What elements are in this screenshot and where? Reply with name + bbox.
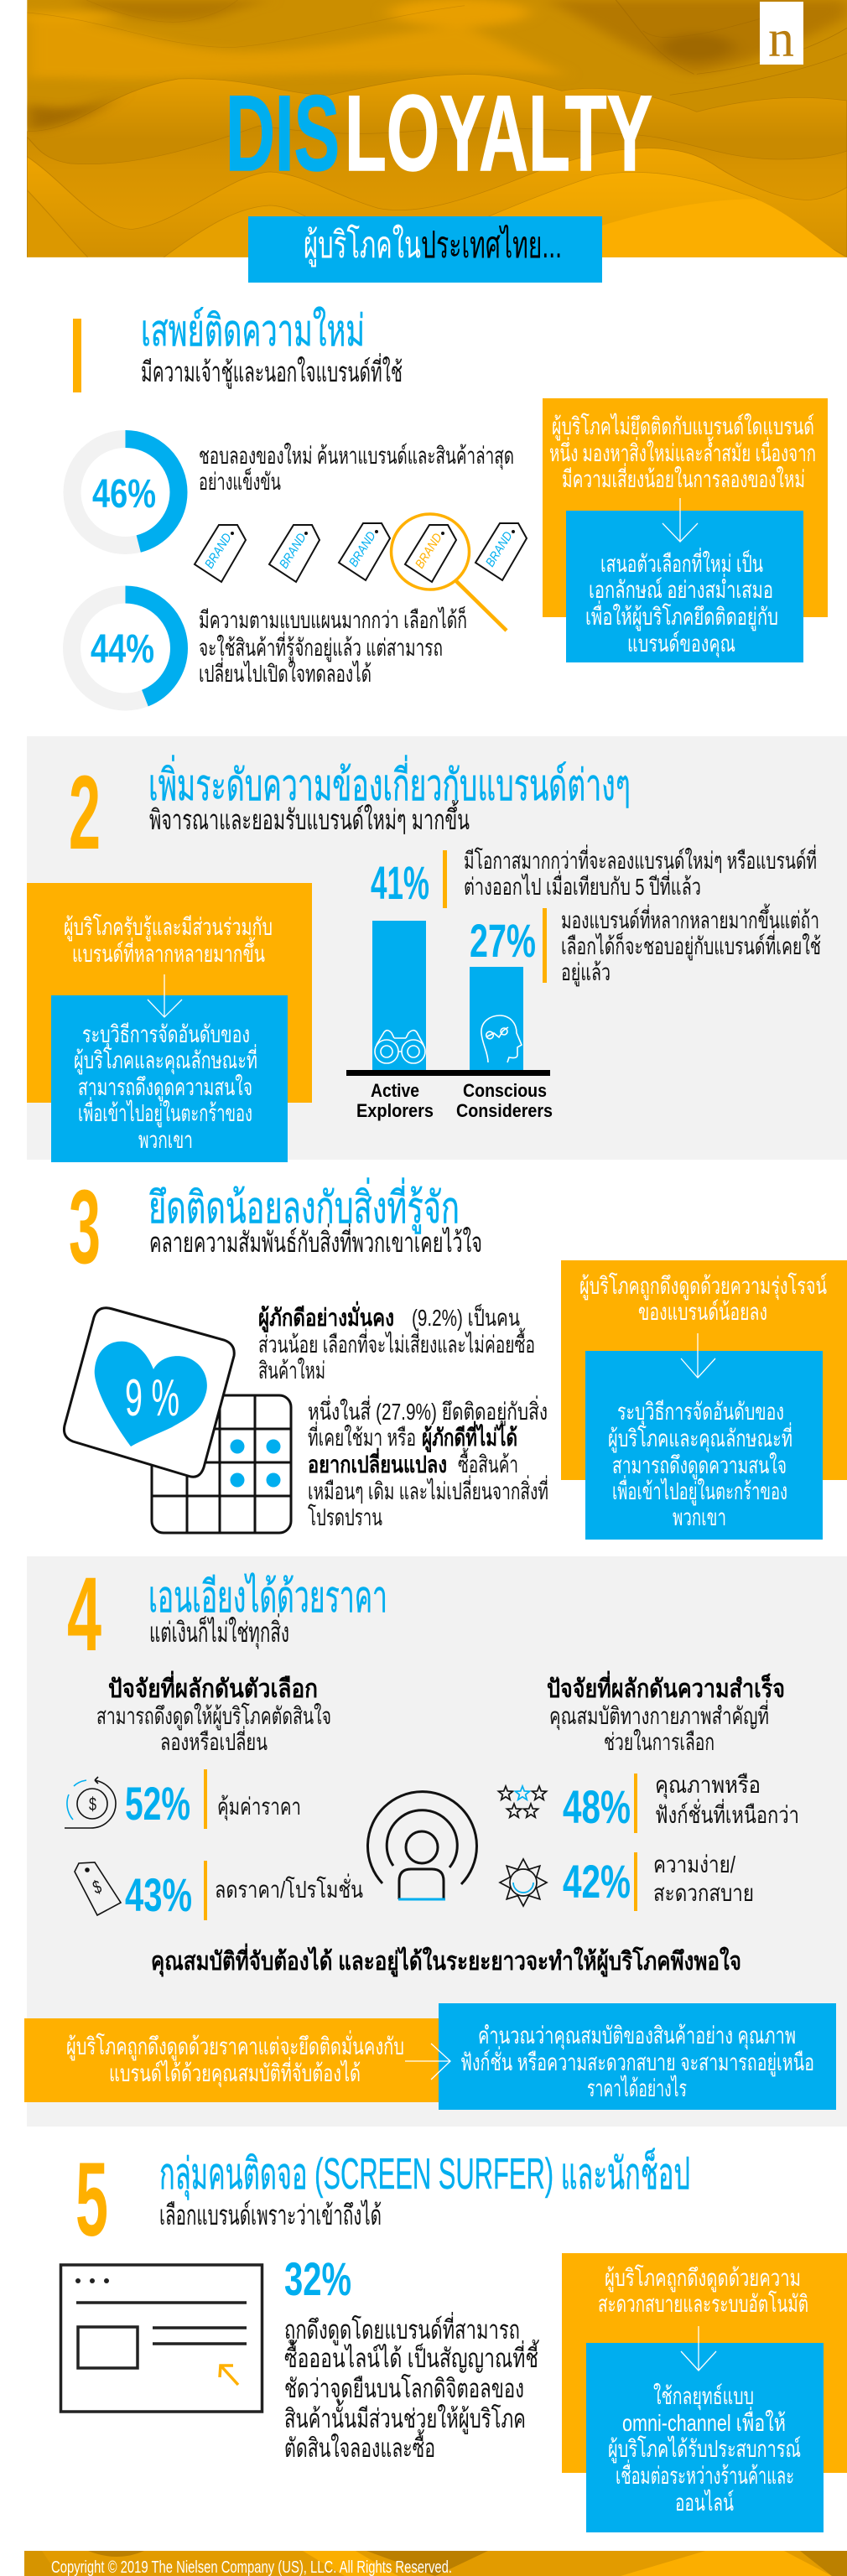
section 2 panel bbox=[27, 736, 847, 1162]
callout 1: เสนอตัวเลือกที่ใหม่ เป็น bbox=[600, 548, 763, 577]
text: passive loyalists: เหมือนๆ เดิม และไม่เปลี่ยนจากสิ่งที่ bbox=[308, 1475, 548, 1504]
main title: DIS bbox=[226, 74, 340, 194]
subheading 2: พิจารณาและยอมรับแบรนด์ใหม่ๆ มากขึ้น bbox=[149, 800, 470, 835]
stat 42 percent bbox=[500, 1852, 754, 1911]
text 44 percent: จะใช้สินค้าที่รู้จักอยู่แล้ว แต่สามารถ bbox=[199, 631, 443, 662]
callout 2: สามารถดึงดูดความสนใจ bbox=[78, 1073, 252, 1102]
arrow bbox=[681, 1333, 715, 1378]
donut 44 percent: 44% bbox=[91, 627, 154, 672]
right column heading: ปัจจัยที่ผลักดันความสำเร็จ bbox=[547, 1670, 785, 1703]
stat 27 percent: อยู่แล้ว bbox=[561, 959, 611, 987]
callout 4: ผู้บริโภคถูกดึงดูดด้วยราคาแต่จะยึดติดมั่นคงกับ bbox=[66, 2030, 404, 2061]
left column heading: ลองหรือเปลี่ยน bbox=[160, 1726, 268, 1755]
icon: head bbox=[481, 1015, 522, 1062]
number 5: 5 bbox=[75, 2142, 108, 2258]
icon: price tag bbox=[75, 1862, 121, 1915]
text 32 percent bbox=[284, 2312, 539, 2463]
brand tags row: BRAND bbox=[202, 531, 235, 571]
text 32 percent: สินค้านั้นมีส่วนช่วยให้ผู้บริโภค bbox=[284, 2400, 526, 2434]
subheading 1: มีความเจ้าชู้และนอกใจแบรนด์ที่ใช้ bbox=[141, 353, 403, 389]
callout 4 bbox=[24, 2003, 836, 2110]
stat 43 percent: 43% bbox=[125, 1868, 192, 1921]
callout 2: แบรนด์ที่หลากหลายมากขึ้น bbox=[72, 937, 265, 967]
stat 32 percent: 32% bbox=[284, 2252, 351, 2305]
stat 48 percent: 48% bbox=[563, 1780, 631, 1833]
callout 1: เอกลักษณ์ อย่างสม่ำเสมอ bbox=[589, 574, 773, 603]
icon: stars bbox=[498, 1786, 547, 1817]
text 44 percent bbox=[199, 605, 467, 687]
subheading 3: คลายความสัมพันธ์กับสิ่งที่พวกเขาเคยไว้ใจ bbox=[149, 1223, 482, 1258]
text: passive loyalists: หนึ่งในสี่ (27.9%) ยึดติดอยู่กับสิ่ง bbox=[308, 1395, 548, 1426]
tag bbox=[195, 525, 246, 582]
section 3 bbox=[64, 1169, 847, 1540]
logo bbox=[760, 2, 803, 68]
left column heading: สามารถดึงดูดให้ผู้บริโภคตัดสินใจ bbox=[96, 1702, 331, 1731]
subtitle box bbox=[248, 216, 602, 283]
icon: binoculars bbox=[375, 1031, 425, 1063]
text 46 percent: อย่างแข็งขัน bbox=[199, 467, 281, 495]
text 32 percent: ซื้อออนไลน์ได้ เป็นสัญญาณที่ชี้ bbox=[284, 2340, 539, 2373]
number 4: 4 bbox=[67, 1556, 101, 1673]
callout 1 bbox=[543, 398, 828, 662]
tag bbox=[475, 523, 527, 580]
section 4 panel bbox=[24, 1556, 847, 2127]
stat 27 percent: 27% bbox=[470, 914, 536, 967]
callout 2 bbox=[27, 883, 312, 1162]
bar chart bbox=[346, 921, 553, 1121]
text 32 percent: ถูกดึงดูดโดยแบรนด์ที่สามารถ bbox=[284, 2312, 520, 2345]
callout 2: ระบุวิธีการจัดอันดับของ bbox=[82, 1021, 250, 1049]
number 3: 3 bbox=[69, 1169, 101, 1285]
donut 46 percent: 46% bbox=[92, 472, 156, 517]
callout 2: เพื่อเข้าไปอยู่ในตะกร้าของ bbox=[78, 1097, 252, 1128]
header banner bbox=[11, 0, 847, 283]
arrow bbox=[681, 2326, 716, 2371]
heading 1: เสพย์ติดความใหม่ bbox=[141, 306, 365, 356]
subheading 4: แต่เงินก็ไม่ใช่ทุกสิ่ง bbox=[149, 1613, 289, 1649]
heading 4: เอนเอียงได้ด้วยราคา bbox=[148, 1572, 387, 1622]
bar chart: Explorers bbox=[356, 1100, 434, 1121]
text: committed loyalists bbox=[258, 1301, 535, 1384]
icon: loyalty card grid: 9 % bbox=[125, 1369, 179, 1427]
callout 3: พวกเขา bbox=[673, 1504, 726, 1530]
callout 1: เพื่อให้ผู้บริโภคยึดติดอยู่กับ bbox=[585, 600, 778, 631]
callout 1: แบรนด์ของคุณ bbox=[627, 631, 735, 658]
donut 44 percent bbox=[72, 595, 179, 702]
text: passive loyalists: ที่เคยใช้มา หรือ bbox=[308, 1421, 416, 1451]
magnified tag bbox=[405, 525, 456, 582]
heart bbox=[95, 1342, 207, 1446]
bar chart: Considerers bbox=[456, 1100, 553, 1121]
text: committed loyalists: ผู้ภักดีอย่างมั่นคง bbox=[258, 1301, 394, 1332]
main title: LOYALTY bbox=[345, 74, 652, 194]
stat 41 percent: 41% bbox=[371, 856, 429, 909]
subheading 5: เลือกแบรนด์เพราะว่าเข้าถึงได้ bbox=[159, 2199, 382, 2231]
callout 2: ผู้บริโภครับรู้และมีส่วนร่วมกับ bbox=[64, 913, 273, 942]
callout 5 bbox=[562, 2253, 847, 2532]
donut 46 percent bbox=[72, 439, 179, 545]
icon: price tag: $ bbox=[90, 1876, 104, 1898]
bar chart: Conscious bbox=[463, 1080, 547, 1101]
main title bbox=[226, 74, 652, 194]
brand tags row: BRAND bbox=[413, 531, 445, 571]
callout 4: แบรนด์ได้ด้วยคุณสมบัติที่จับต้องได้ bbox=[109, 2057, 361, 2088]
stat 52 percent: 52% bbox=[125, 1777, 190, 1830]
right column heading: คุณสมบัติทางกายภาพสำคัญที่ bbox=[549, 1700, 769, 1731]
footer bbox=[24, 2551, 847, 2576]
section 5 bbox=[60, 2142, 847, 2532]
text 32 percent: ชัดว่าจุดยืนบนโลกดิจิตอลของ bbox=[284, 2374, 524, 2405]
stat 43 percent bbox=[75, 1861, 363, 1921]
text: committed loyalists: สินค้าใหม่ bbox=[258, 1357, 325, 1384]
logo: n bbox=[768, 8, 794, 68]
icon: browser window bbox=[60, 2265, 262, 2412]
bar chart: Active bbox=[371, 1080, 419, 1101]
callout 5: ใช้กลยุทธ์แบบ bbox=[653, 2382, 754, 2411]
text: passive loyalists: โปรดปราน bbox=[308, 1504, 382, 1530]
callout 5: omni-channel เพื่อให้ bbox=[622, 2407, 786, 2436]
stat 48 percent: ฟังก์ชั่นที่เหนือกว่า bbox=[655, 1799, 799, 1828]
callout 5: ออนไลน์ bbox=[675, 2490, 734, 2516]
icon: loyalty card grid bbox=[64, 1308, 291, 1533]
text 46 percent: ชอบลองของใหม่ ค้นหาแบรนด์และสินค้าล่าสุด bbox=[199, 442, 514, 470]
stat 41 percent bbox=[371, 844, 817, 909]
tag bbox=[269, 525, 320, 582]
stat 52 percent: คุ้มค่าราคา bbox=[217, 1794, 301, 1821]
brand tags row: BRAND bbox=[483, 529, 516, 569]
arrow bbox=[148, 974, 182, 1017]
number 2: 2 bbox=[69, 755, 101, 871]
icon: coin: $ bbox=[89, 1794, 96, 1815]
icon: coin bbox=[65, 1777, 116, 1828]
magnifying glass bbox=[391, 514, 507, 631]
stat 42 percent: 42% bbox=[563, 1855, 631, 1908]
stat 43 percent: ลดราคา/โปรโมชั่น bbox=[215, 1873, 363, 1903]
left column heading bbox=[96, 1670, 331, 1755]
icon: person with signal arcs bbox=[367, 1792, 476, 1899]
subtitle box: ประเทศไทย... bbox=[421, 224, 562, 266]
stat 41 percent: ต่างออกไป เมื่อเทียบกับ 5 ปีที่แล้ว bbox=[464, 870, 701, 900]
tag bbox=[339, 523, 390, 580]
arrow bbox=[663, 498, 698, 542]
stat 48 percent: คุณภาพหรือ bbox=[655, 1772, 761, 1800]
stat 52 percent bbox=[65, 1769, 301, 1830]
text: passive loyalists: ซื้อสินค้า bbox=[458, 1447, 518, 1478]
callout 3: ของแบรนด์น้อยลง bbox=[638, 1299, 767, 1325]
number 1 bbox=[73, 319, 81, 392]
stat 42 percent: สะดวกสบาย bbox=[653, 1880, 754, 1906]
text: committed loyalists: (9.2%) เป็นคน bbox=[412, 1303, 520, 1331]
callout 3 bbox=[561, 1260, 847, 1540]
subtitle box: ผู้บริโภคใน bbox=[304, 224, 421, 267]
stat 42 percent: ความง่าย/ bbox=[653, 1852, 735, 1877]
right column heading: ช่วยในการเลือก bbox=[604, 1728, 714, 1755]
callout 2: พวกเขา bbox=[138, 1127, 193, 1153]
brand tags row bbox=[195, 514, 527, 631]
text 32 percent: ตัดสินใจลองและซื้อ bbox=[284, 2429, 435, 2463]
text 44 percent: มีความตามแบบแผนมากกว่า เลือกได้ก็ bbox=[199, 605, 467, 633]
heading 3: ยึดติดน้อยลงกับสิ่งที่รู้จัก bbox=[148, 1177, 460, 1234]
stat 48 percent bbox=[498, 1772, 799, 1833]
left column heading: ปัจจัยที่ผลักดันตัวเลือก bbox=[108, 1670, 318, 1703]
right column heading bbox=[547, 1670, 785, 1755]
brand tags row: BRAND bbox=[346, 529, 379, 569]
callout 4: ราคาได้อย่างไร bbox=[587, 2075, 687, 2101]
section 1: 1 bbox=[67, 299, 87, 415]
text: committed loyalists: ส่วนน้อย เลือกที่จะไม่เสี่ยงและไม่ค่อยซื้อ bbox=[258, 1327, 535, 1358]
brand tags row: BRAND bbox=[277, 531, 309, 571]
icon: sun bbox=[500, 1859, 547, 1906]
callout 2: ผู้บริโภคและคุณลักษณะที่ bbox=[74, 1044, 257, 1075]
section 1 bbox=[67, 299, 828, 702]
stat 27 percent bbox=[470, 903, 821, 987]
text: passive loyalists: อยากเปลี่ยนแปลง bbox=[308, 1447, 447, 1478]
wavy gold background bbox=[11, 0, 847, 260]
text: passive loyalists: ผู้ภักดีที่ไม่ได้ bbox=[422, 1420, 517, 1452]
text 44 percent: เปลี่ยนไปเปิดใจทดลองได้ bbox=[199, 657, 372, 687]
text 46 percent bbox=[199, 442, 514, 495]
text: passive loyalists bbox=[308, 1395, 548, 1530]
arrow bbox=[405, 2044, 450, 2080]
